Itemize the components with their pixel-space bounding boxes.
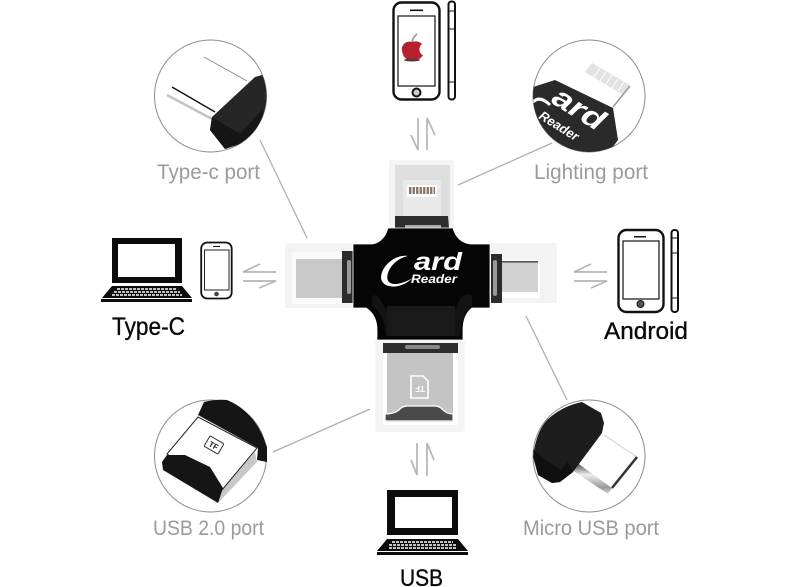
icon: bottom laptop xyxy=(377,490,468,555)
label: Android: Android xyxy=(604,318,688,345)
icon: left laptop xyxy=(101,238,192,302)
icon: top phone side xyxy=(448,2,455,100)
arrows: left xyxy=(243,264,276,288)
arrows: right xyxy=(574,264,607,288)
icon: top phone front xyxy=(394,2,440,100)
connector: top lightning xyxy=(389,160,454,230)
detail circle: USB 2.0 port xyxy=(154,400,267,512)
logo: Card Reader: ard xyxy=(414,248,463,276)
infographic: card reader ports xyxy=(101,0,686,586)
leader lines xyxy=(260,140,567,452)
icon: right phone front xyxy=(618,230,664,312)
detail circle: Type-c port xyxy=(154,40,270,152)
detail circle: Micro USB port xyxy=(533,400,645,512)
label: Lighting port: Lighting port xyxy=(534,161,648,184)
detail circle: Lighting port: ard xyxy=(546,81,612,138)
logo: Card Reader xyxy=(381,248,463,287)
logo: Card Reader: Reader xyxy=(411,272,459,286)
label: Type-c port: Type-c port xyxy=(157,161,260,184)
icon: right phone side xyxy=(672,230,678,312)
label: Micro USB port: Micro USB port xyxy=(523,517,659,540)
icon: micro SD glyph: TF xyxy=(207,440,220,452)
label: USB 2.0 port: USB 2.0 port xyxy=(153,517,264,540)
connector: bottom USB card slot xyxy=(375,338,465,432)
connector: right micro USB xyxy=(488,243,557,303)
detail circle: Lighting port xyxy=(530,40,645,156)
icon: SD card on slot: TF xyxy=(415,384,425,393)
icon: red apple xyxy=(402,34,423,62)
icon: left phone xyxy=(201,242,232,298)
connector: left Type-C xyxy=(285,243,355,308)
arrows: top xyxy=(411,118,435,150)
device body: black card reader xyxy=(353,228,490,340)
detail circle: Lighting port: Reader xyxy=(536,108,583,144)
label: Type-C: Type-C xyxy=(112,313,185,341)
arrows: bottom xyxy=(411,443,434,476)
